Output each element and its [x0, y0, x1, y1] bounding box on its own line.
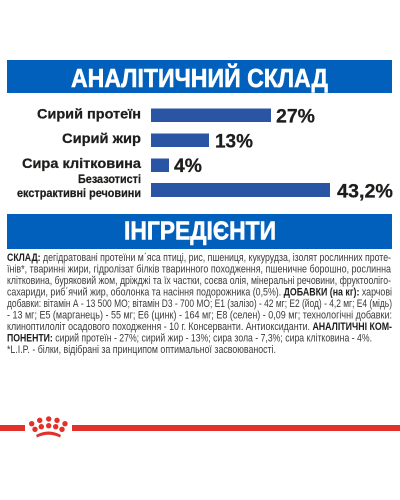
text block: ingredients list: сахариди, риб΄ячий жир, оболонка та насіння подорожника (0,5%). ДОБАВКИ (на кг): харчові	[7, 286, 392, 298]
row: crude protein: Сирий протеїн	[37, 106, 141, 122]
text block: ingredients list: клиноптилоліт осадового походження - 10 г. Консерванти. Антиоксиданти. АНАЛІТИЧНІ КОМ-	[7, 321, 392, 333]
footer line: left segment	[0, 425, 25, 431]
text block: ingredients list	[6, 252, 392, 356]
footer line: right segment	[72, 425, 400, 431]
row: nitrogen-free extract	[17, 172, 393, 202]
row: crude fat	[62, 130, 253, 152]
row: crude fat: 13%	[215, 130, 253, 152]
row: crude fibre	[22, 155, 202, 177]
heading: ingredients: ІНГРЕДІЄНТИ	[124, 218, 276, 246]
row: crude protein	[37, 106, 315, 128]
row: nitrogen-free extract: екстрактивні речовини	[17, 186, 141, 200]
icon: royal crown logo	[29, 416, 68, 438]
row: crude fibre: 4%	[174, 155, 202, 177]
panel: ingredients header	[7, 214, 392, 249]
panel: analytical composition header	[7, 60, 392, 93]
row: nitrogen-free extract: Безазотисті	[78, 172, 141, 186]
bar chart: nutrient percentages	[17, 106, 393, 202]
row: crude fat: Сирий жир	[62, 131, 141, 146]
heading: analytical composition: АНАЛІТИЧНИЙ СКЛАД	[71, 63, 328, 93]
row: crude fibre: Сира клітковина	[22, 156, 142, 171]
row: crude protein: 27%	[276, 106, 315, 128]
text block: ingredients list: *L.I.P. - білки, відібрані за принципом оптимальної засвоюваності.	[7, 344, 276, 356]
row: nitrogen-free extract: 43,2%	[337, 180, 393, 202]
